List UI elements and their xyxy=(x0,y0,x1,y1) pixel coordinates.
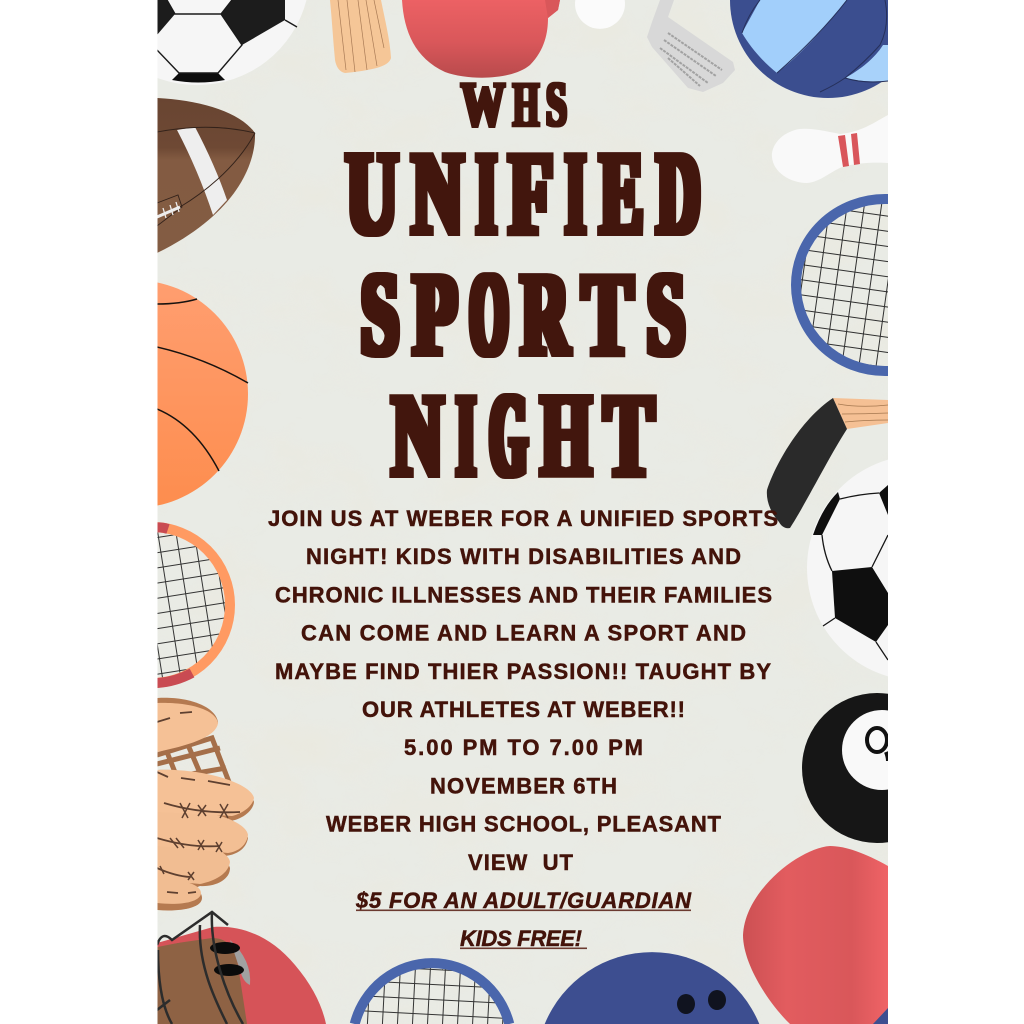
heading: WHS: S xyxy=(546,70,567,140)
icon: hockey stick xyxy=(767,398,888,528)
text block: time, date and location: WEBER HIGH SCHOOL, PLEASANT xyxy=(326,812,722,837)
icon: baseball bat xyxy=(330,0,391,73)
icon: white golf ball xyxy=(575,0,625,29)
icon: baseball glove xyxy=(157,698,254,910)
heading: WHS: H xyxy=(513,70,539,140)
text block: admission prices: $5 FOR AN ADULT/GUARDIAN xyxy=(355,888,692,913)
text block: time, date and location: VIEW UT xyxy=(468,850,574,875)
icon: tennis racket right xyxy=(791,194,888,376)
icon: eight ball xyxy=(802,693,888,843)
icon: soccer ball top left xyxy=(158,0,306,85)
text block: event description: NIGHT! KIDS WITH DISABILITIES AND xyxy=(306,544,741,569)
text block: event description: OUR ATHLETES AT WEBER!! xyxy=(362,697,685,722)
icon: basketball xyxy=(158,282,248,506)
title line: UNIFIED: E xyxy=(600,127,643,259)
icon: red paddle bottom right xyxy=(743,846,888,1024)
title line: UNIFIED: I xyxy=(477,127,496,259)
text block: event description: CHRONIC ILLNESSES AND THEIR FAMILIES xyxy=(275,582,772,607)
text block: event description: CAN COME AND LEARN A SPORT AND xyxy=(301,621,746,646)
icon: american football xyxy=(157,98,255,253)
icon: catcher helmet and mask xyxy=(157,912,326,1024)
icon: bowling pin xyxy=(772,115,888,183)
text block: admission prices: KIDS FREE! xyxy=(460,926,582,951)
paper background xyxy=(157,0,889,1024)
title: Unified Sports Night xyxy=(344,152,702,479)
title line: SPORTS: O xyxy=(470,248,508,380)
text block: time, date and location: 5.00 PM TO 7.00 PM xyxy=(404,735,643,760)
icon: golf club xyxy=(647,0,735,92)
icon: tennis racket left xyxy=(158,522,235,688)
title line: NIGHT: G xyxy=(490,369,527,501)
title line: SPORTS: S xyxy=(361,248,399,380)
title line: UNIFIED: U xyxy=(346,127,398,259)
title line: UNIFIED: F xyxy=(509,127,553,259)
title line: SPORTS: T xyxy=(582,248,633,380)
title line: NIGHT: T xyxy=(604,369,654,501)
icon: tennis racket bottom xyxy=(355,963,509,1024)
title line: SPORTS: R xyxy=(521,248,570,380)
text block: time, date and location xyxy=(326,735,722,875)
title line: NIGHT: I xyxy=(457,369,475,501)
text block: admission prices xyxy=(355,888,692,951)
icon: volleyball xyxy=(730,0,888,98)
title line: UNIFIED: D xyxy=(657,127,700,259)
icon: red paddle top xyxy=(402,0,560,78)
title line: UNIFIED: N xyxy=(412,127,463,259)
title line: UNIFIED: I xyxy=(566,127,585,259)
title line: NIGHT: N xyxy=(392,369,443,501)
text block: time, date and location: NOVEMBER 6TH xyxy=(430,773,617,798)
title line: SPORTS: S xyxy=(647,248,685,380)
poster xyxy=(158,0,888,1024)
text block: event description: JOIN US AT WEBER FOR A UNIFIED SPORTS xyxy=(268,506,778,531)
icon: bowling ball xyxy=(545,952,759,1024)
heading: WHS: W xyxy=(461,70,505,140)
icon: soccer ball right xyxy=(807,460,888,676)
text block: event description: MAYBE FIND THIER PASSION!! TAUGHT BY xyxy=(275,659,771,684)
title line: NIGHT: H xyxy=(541,369,591,501)
text block: event description xyxy=(268,506,778,722)
title line: SPORTS: P xyxy=(413,248,457,380)
